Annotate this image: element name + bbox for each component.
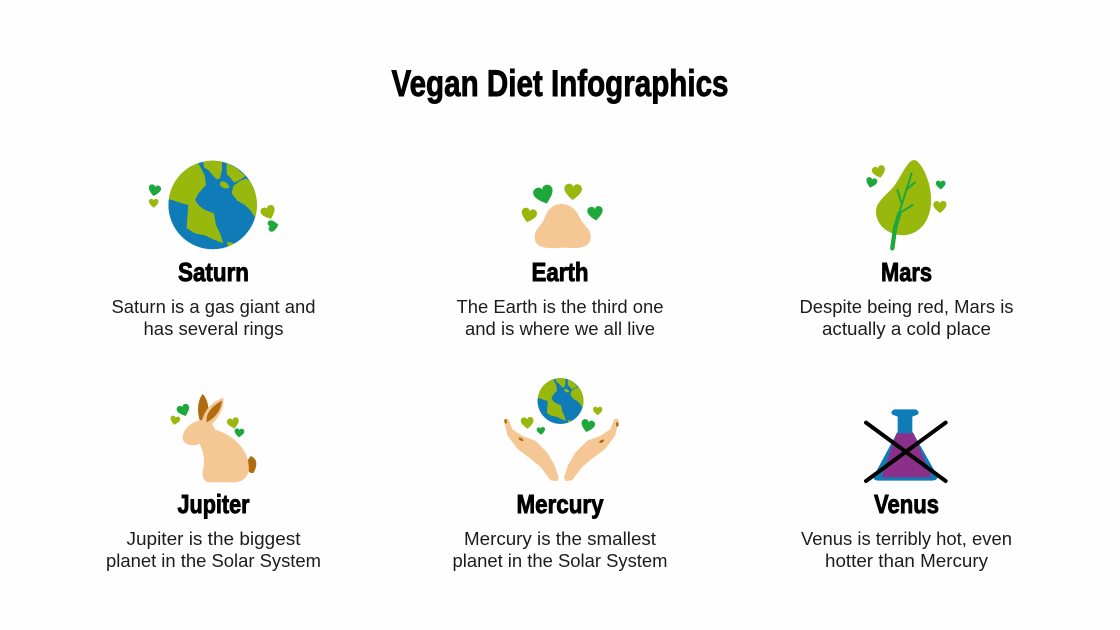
icon: globe with hearts bbox=[147, 157, 279, 250]
text: Jupiter description bbox=[106, 529, 321, 571]
text: Mars description: Despite being red, Mars is bbox=[800, 297, 1014, 317]
panel: Earth bbox=[456, 183, 664, 339]
panel: Mercury bbox=[452, 376, 668, 571]
title: Vegan Diet Infographics bbox=[392, 63, 728, 104]
text: Jupiter description: planet in the Solar System bbox=[106, 551, 321, 571]
text: Venus description: Venus is terribly hot, even bbox=[801, 529, 1012, 549]
text: Venus description bbox=[801, 529, 1012, 571]
icon: hands holding globe bbox=[504, 376, 619, 480]
heading: Mars: Mars bbox=[881, 257, 932, 287]
panel: Mars bbox=[800, 160, 1014, 339]
heading: Earth: Earth bbox=[532, 257, 588, 287]
panel: Venus bbox=[801, 409, 1012, 571]
heading: Mercury: Mercury bbox=[516, 489, 604, 519]
text: Saturn description bbox=[112, 297, 316, 339]
icon: crossed-out flask bbox=[866, 409, 946, 481]
text: Saturn description: Saturn is a gas giant and bbox=[112, 297, 316, 317]
heading: Venus: Venus bbox=[874, 489, 939, 519]
panel: Jupiter bbox=[106, 394, 321, 571]
heading: Jupiter: Jupiter bbox=[178, 489, 250, 519]
text: Earth description: The Earth is the third one bbox=[456, 297, 664, 317]
icon: rabbit with hearts bbox=[169, 394, 256, 482]
text: Jupiter description: Jupiter is the biggest bbox=[126, 529, 300, 549]
heading: Saturn: Saturn bbox=[178, 257, 249, 287]
text: Saturn description: has several rings bbox=[144, 319, 284, 339]
text: Mercury description: planet in the Solar System bbox=[452, 551, 668, 571]
panel: Saturn bbox=[112, 157, 316, 339]
text: Mars description bbox=[800, 297, 1014, 339]
text: Mars description: actually a cold place bbox=[822, 319, 991, 339]
text: Mercury description bbox=[452, 529, 668, 571]
text: Mercury description: Mercury is the smallest bbox=[464, 529, 656, 549]
icon: leaf with hearts bbox=[865, 160, 947, 248]
text: Earth description: and is where we all live bbox=[465, 319, 655, 339]
text: Venus description: hotter than Mercury bbox=[825, 551, 988, 571]
icon: paw with hearts bbox=[520, 183, 604, 248]
text: Earth description bbox=[456, 297, 664, 339]
